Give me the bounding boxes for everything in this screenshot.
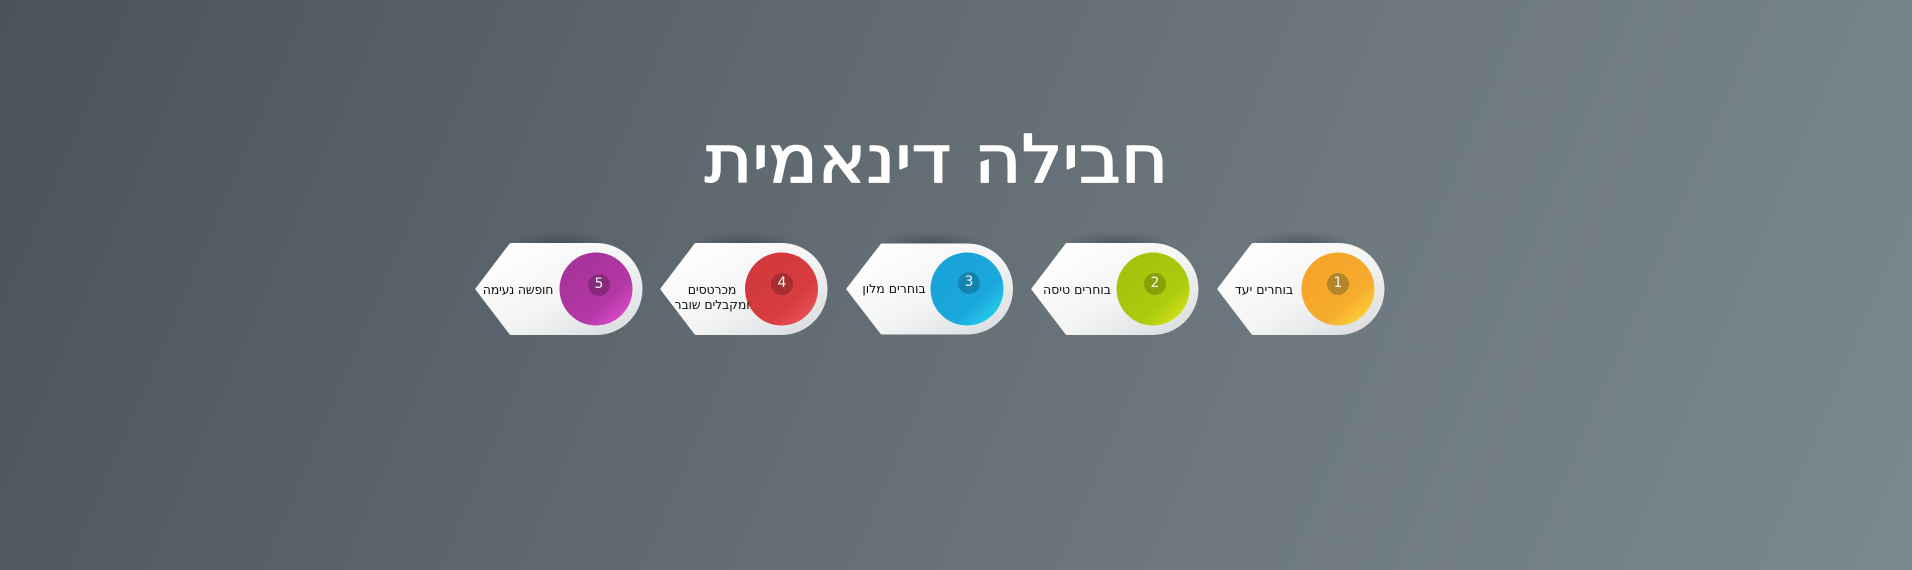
number 5: 5	[595, 276, 603, 292]
number 3: 3	[965, 274, 973, 290]
step 2: choose flight	[1031, 235, 1198, 335]
number 2	[1144, 273, 1166, 295]
title: חבילה דינאמית	[705, 122, 1168, 198]
label: מכרטסים	[688, 282, 736, 297]
label: חופשה נעימה	[483, 282, 553, 297]
number 3	[958, 272, 980, 294]
number 2: 2	[1151, 275, 1159, 291]
label: בוחרים טיסה	[1043, 282, 1111, 297]
label	[675, 282, 749, 312]
step 3: choose hotel	[846, 235, 1013, 334]
label: בוחרים יעד	[1235, 282, 1293, 297]
number 4	[771, 273, 793, 295]
step 5: pleasant vacation	[475, 236, 642, 335]
number 4: 4	[778, 275, 786, 291]
label: בוחרים מלון	[862, 281, 926, 296]
step 4: tickets and vouchers	[660, 236, 828, 335]
number 1	[1327, 273, 1349, 295]
step 1: choose destination	[1217, 234, 1384, 335]
number 1: 1	[1334, 275, 1342, 291]
number 5	[588, 274, 610, 296]
label: ומקבלים שובר	[675, 297, 749, 312]
